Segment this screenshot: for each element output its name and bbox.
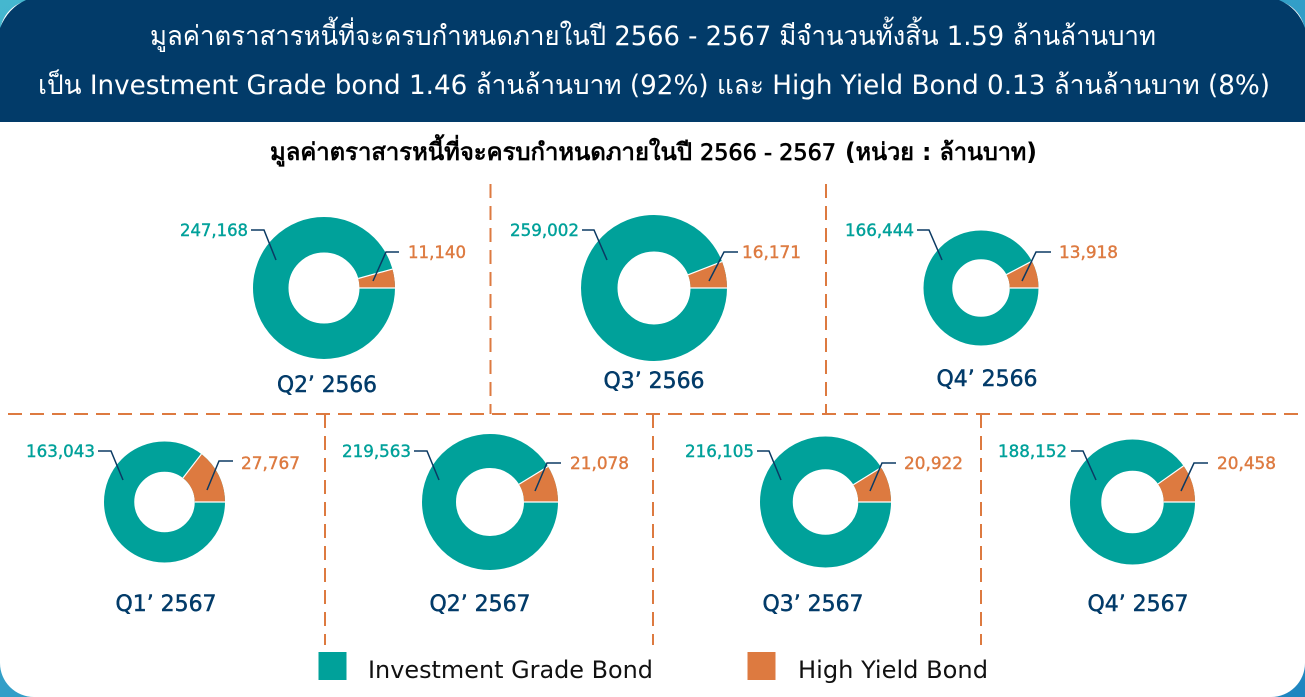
quarter label: Q2’ 2567: [430, 592, 530, 617]
quarter label: Q3’ 2567: [762, 592, 864, 617]
chart title: (หน่วย : ล้านบาท): [845, 138, 1037, 166]
value: investment grade: 188,152: [998, 442, 1067, 461]
value: investment grade: 219,563: [342, 442, 411, 461]
value: high yield: 27,767: [241, 454, 300, 473]
value: high yield: 11,140: [408, 243, 466, 262]
donut: Q3 2566: [510, 217, 801, 394]
header line 1: มูลค่าตราสารหนี้ที่จะครบกำหนดภายในปี 2566 - 2567 มีจำนวนทั้งสิ้น 1.59 ล้านล้านบาท: [150, 16, 1156, 52]
legend label: investment grade: Investment Grade Bond: [368, 656, 653, 684]
donut: Q1 2567: [26, 438, 300, 617]
header line 2: เป็น Investment Grade bond 1.46 ล้านล้านบาท (92%) และ High Yield Bond 0.13 ล้านล้านบาท (8%): [38, 67, 1270, 101]
chart title: 2566 - 2567: [700, 140, 836, 166]
value: investment grade: 163,043: [26, 442, 95, 461]
donut: Q4 2566: [845, 221, 1118, 392]
donut: Q2 2566: [180, 221, 466, 398]
donut: Q2 2567: [342, 432, 629, 617]
legend: [318, 652, 988, 684]
donut: Q3 2567: [685, 434, 963, 617]
quarter label: Q1’ 2567: [116, 592, 216, 617]
legend swatch: investment grade: [318, 652, 346, 680]
dashed dividers: [8, 184, 1302, 645]
quarter label: Q3’ 2566: [604, 369, 704, 394]
quarter label: Q2’ 2566: [277, 373, 377, 398]
quarter label: Q4’ 2566: [936, 367, 1038, 392]
value: high yield: 20,922: [904, 454, 963, 473]
legend label: high yield: High Yield Bond: [798, 656, 988, 684]
value: high yield: 21,078: [570, 454, 629, 473]
quarter label: Q4’ 2567: [1088, 592, 1188, 617]
value: high yield: 13,918: [1059, 243, 1118, 262]
legend swatch: high yield: [748, 652, 776, 680]
donut: Q4 2567: [998, 437, 1276, 617]
value: investment grade: 247,168: [180, 221, 248, 240]
value: investment grade: 259,002: [510, 221, 579, 240]
value: high yield: 16,171: [742, 243, 801, 262]
header banner: [0, 0, 1305, 122]
chart title: มูลค่าตราสารหนี้ที่จะครบกำหนดภายในปี: [270, 133, 692, 167]
value: investment grade: 166,444: [845, 221, 914, 240]
value: investment grade: 216,105: [685, 442, 754, 461]
value: high yield: 20,458: [1217, 454, 1276, 473]
chart title: [270, 133, 1037, 167]
